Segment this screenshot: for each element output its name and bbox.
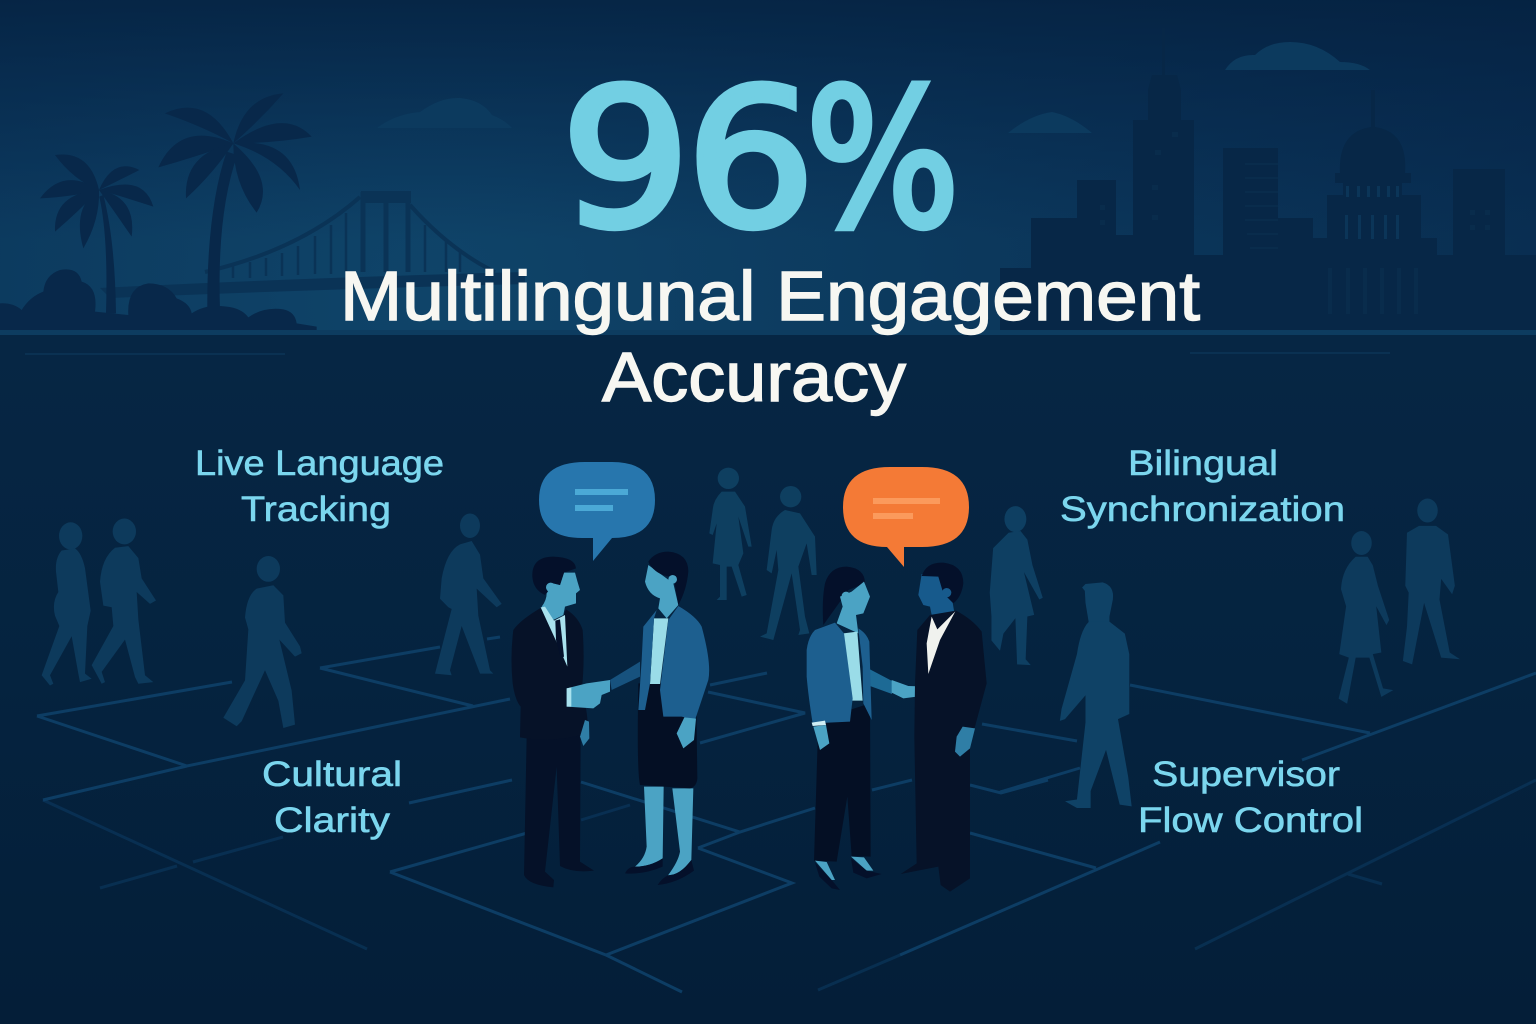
label: bilingual synchronization — [1060, 444, 1345, 529]
label: supervisor flow control — [1138, 755, 1363, 840]
icon: blue speech bubble — [539, 462, 655, 561]
headline figure 96%: 6 — [686, 49, 815, 270]
walker group: centre — [709, 468, 817, 640]
woman with cardigan, left pair — [610, 552, 709, 885]
woman with cardigan, right pair — [807, 567, 928, 890]
label: supervisor flow control: Supervisor — [1152, 755, 1340, 794]
ground plane — [0, 330, 1536, 1024]
label: cultural clarity — [262, 755, 402, 840]
walker — [42, 522, 92, 686]
city skyline silhouette — [1000, 28, 1536, 332]
headline figure 96%: % — [806, 48, 959, 270]
bridge silhouette — [100, 191, 525, 298]
walker — [1339, 531, 1393, 704]
floor grid lines — [37, 637, 1536, 992]
walker — [990, 506, 1043, 665]
walker — [92, 519, 156, 684]
label: bilingual synchronization: Synchronization — [1060, 490, 1345, 529]
small palm — [40, 154, 153, 313]
label: supervisor flow control: Flow Control — [1138, 801, 1363, 840]
background sky — [0, 0, 1536, 340]
tower — [1133, 28, 1194, 332]
icon: orange speech bubble — [843, 467, 969, 567]
background crowd — [42, 468, 1460, 808]
label: live language tracking — [195, 444, 444, 529]
bushes — [0, 269, 317, 331]
clouds — [377, 42, 1370, 133]
title: Multilingunal Engagement — [340, 257, 1200, 335]
label: live language tracking: Live Language — [195, 444, 444, 483]
walker group: right — [990, 499, 1460, 808]
walker group: left pair and solo walkers — [42, 513, 502, 728]
label: live language tracking: Tracking — [241, 490, 391, 529]
palm trees and shoreline — [0, 93, 317, 331]
title — [340, 257, 1200, 416]
walker — [709, 468, 752, 600]
walker — [1403, 499, 1460, 664]
large palm — [158, 93, 312, 310]
title: Accuracy — [602, 338, 906, 416]
walker — [435, 513, 502, 675]
man in dark suit, right pair — [901, 563, 987, 892]
capitol dome — [1327, 90, 1536, 332]
label: bilingual synchronization: Bilingual — [1128, 444, 1278, 483]
man in dark suit, left pair — [511, 557, 610, 887]
label: cultural clarity: Clarity — [274, 801, 391, 840]
walker — [760, 486, 817, 640]
walker — [223, 556, 302, 728]
foreground figures — [511, 552, 987, 892]
walker large — [1060, 582, 1132, 808]
label: cultural clarity: Cultural — [262, 755, 402, 794]
headline figure 96%: 9 — [561, 49, 690, 270]
headline figure 96% — [561, 48, 959, 270]
